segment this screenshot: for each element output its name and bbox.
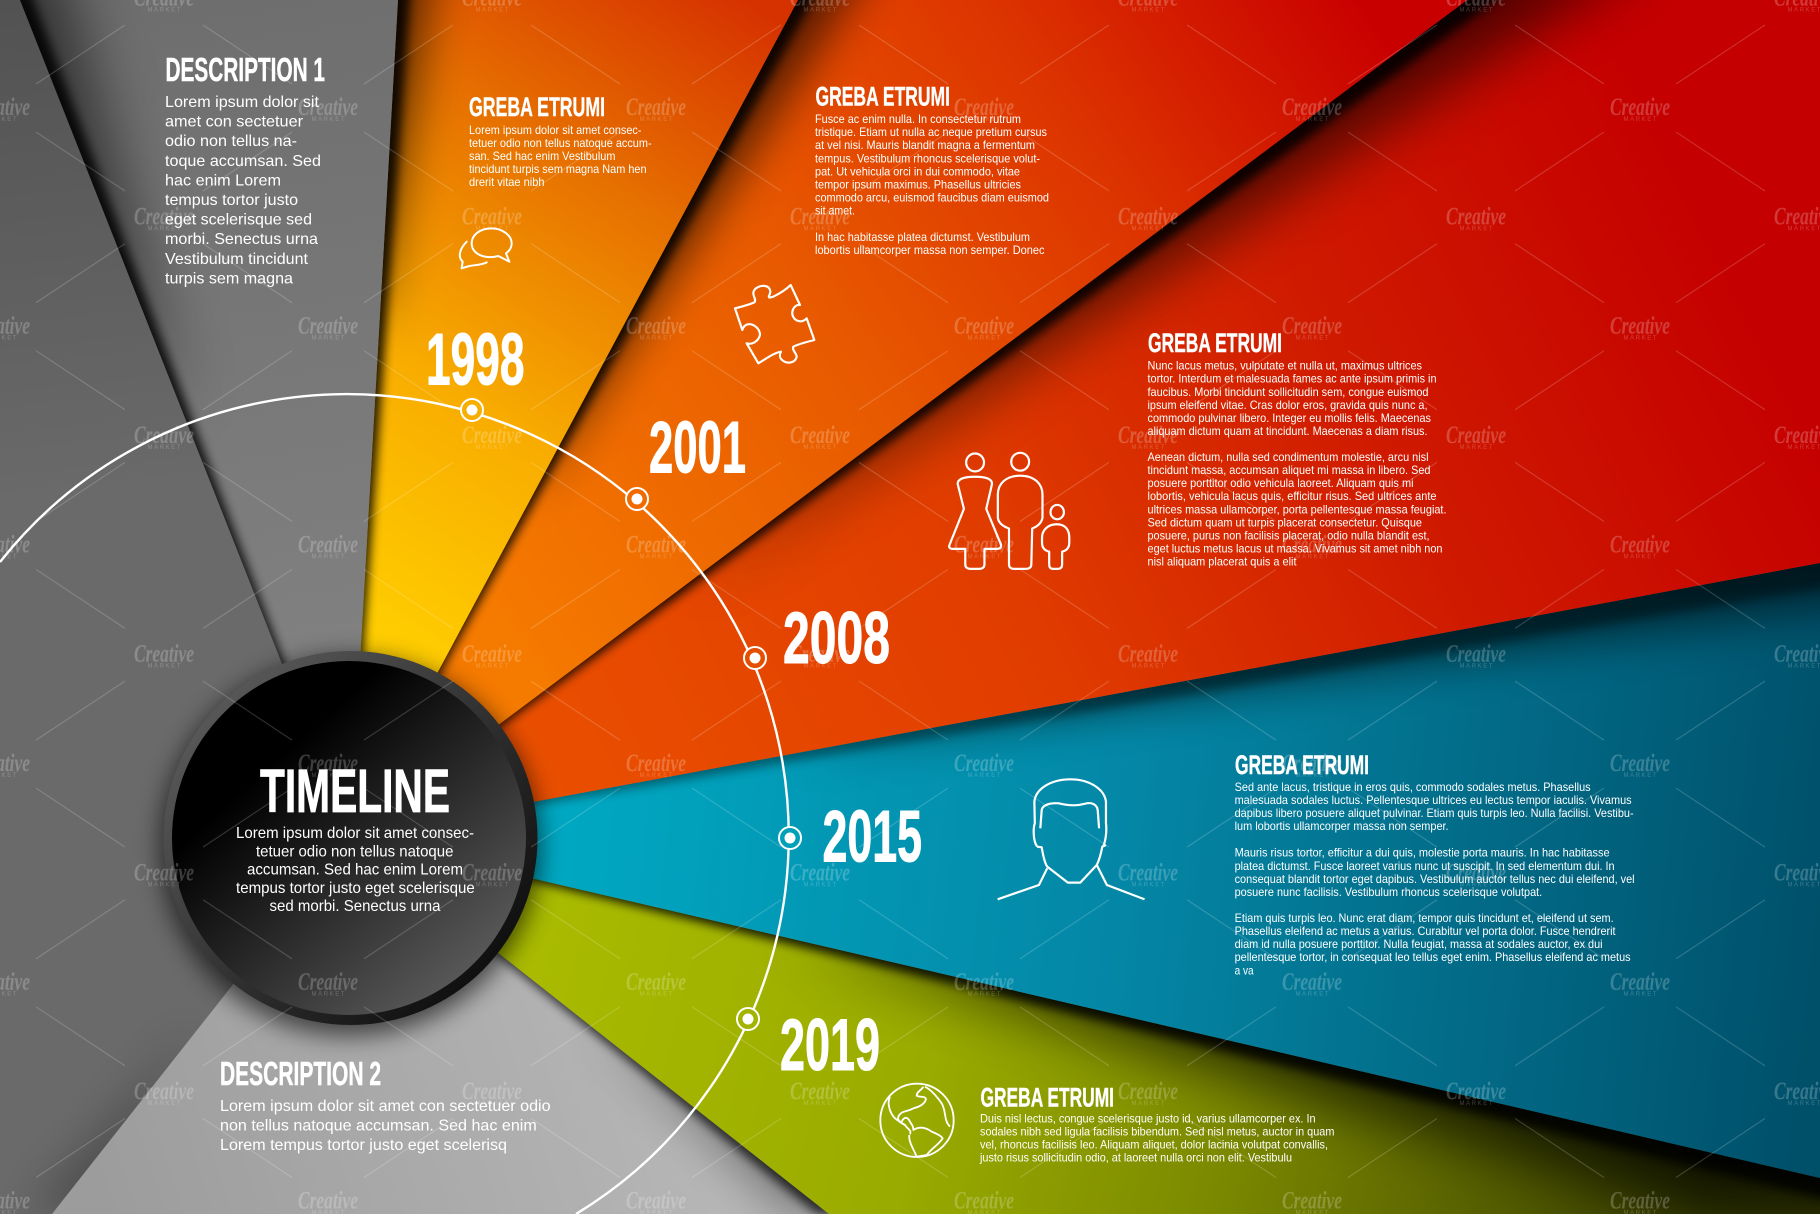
year 1998 with marker: 1998	[426, 320, 524, 401]
text block: greba etrumi blue: lum lobortis ullamcorper massa non semper.	[1235, 820, 1449, 833]
text block: greba etrumi yellow: Lorem ipsum dolor sit amet consec-	[469, 124, 642, 137]
text block: greba etrumi yellow: tetuer odio non tellus natoque accum-	[469, 137, 652, 150]
text block: greba etrumi red: ipsum eleifend vitae. Cras dolor eros, gravida quis nunc a,	[1148, 399, 1428, 412]
text block: greba etrumi red: GREBA ETRUMI	[1148, 328, 1282, 358]
text block: greba etrumi red: ultrices massa ullamcorper, porta pellentesque massa feugiat.	[1148, 503, 1446, 516]
text block: description 2: Lorem tempus tortor justo eget scelerisq	[220, 1137, 507, 1154]
year 2015 with marker	[779, 797, 922, 878]
text block: greba etrumi blue: a va	[1235, 964, 1254, 977]
text block: greba etrumi orange: tristique. Etiam ut nulla ac neque pretium cursus	[815, 126, 1047, 139]
text block: greba etrumi blue: Sed ante lacus, tristique in eros quis, commodo sodales metus. Phasellus	[1235, 781, 1591, 794]
icon: chat bubbles	[460, 228, 512, 268]
year 1998 with marker	[426, 320, 524, 421]
text block: greba etrumi red: Nunc lacus metus, vulputate et nulla ut, maximus ultrices	[1148, 360, 1422, 373]
text block: greba etrumi blue: Etiam quis turpis leo. Nunc erat diam, tempor quis tincidunt et, eleifend ut sem.	[1235, 912, 1614, 925]
text block: greba etrumi green: sodales nibh sed ligula facilisis bibendum. Sed nisl metus, auctor in quam	[980, 1126, 1334, 1139]
icon: globe	[880, 1084, 954, 1157]
text block: greba etrumi blue: consequat blandit tortor eget dapibus. Vestibulum auctor tellus nec dui eleifend, vel	[1235, 873, 1635, 886]
text block: greba etrumi green	[979, 1083, 1334, 1165]
year 2015 with marker: 2015	[822, 797, 922, 878]
timeline arc	[0, 394, 789, 1214]
year 2008 with marker	[744, 598, 890, 679]
panel: green	[498, 878, 1820, 1214]
text block: greba etrumi orange	[815, 82, 1049, 257]
text block: greba etrumi blue	[1235, 750, 1635, 977]
text block: greba etrumi blue: dapibus libero posuere aliquet pulvinar. Etiam quis turpis leo. Nulla facilisi. Vestibu-	[1235, 807, 1634, 820]
icon: head portrait	[998, 779, 1145, 899]
text block: greba etrumi red: aliquam dictum quam at tincidunt. Maecenas a diam risus.	[1148, 425, 1428, 438]
text block: description 1: amet con sectetuer	[165, 114, 304, 131]
panel: red	[499, 0, 1820, 802]
text block: description 2: Lorem ipsum dolor sit amet con sectetuer odio	[220, 1098, 551, 1115]
text block: description 1: turpis sem magna	[165, 270, 293, 287]
text block: greba etrumi red	[1148, 328, 1446, 569]
text block: greba etrumi blue: platea dictumst. Fusce laoreet varius nunc ut suscipit. In sed elementum dui. In	[1235, 860, 1615, 873]
text block: greba etrumi red: commodo pulvinar libero. Integer eu mollis felis. Maecenas	[1148, 412, 1431, 425]
year 2001 with marker: 2001	[649, 408, 746, 489]
text block: description 1: odio non tellus na-	[165, 133, 297, 150]
year 2008 with marker: 2008	[783, 598, 890, 679]
text block: greba etrumi orange: commodo arcu, euismod faucibus diam euismod	[815, 192, 1049, 205]
panel: mid grey	[20, 0, 398, 664]
title: timeline: TIMELINE	[260, 757, 450, 825]
text block: description 1: tempus tortor justo	[165, 192, 298, 209]
panel: blue	[533, 563, 1820, 1178]
text block: greba etrumi blue: Mauris risus tortor, efficitur a dui quis, molestie porta mauris. In hac habitasse	[1235, 847, 1610, 860]
text block: description 1: Lorem ipsum dolor sit	[165, 94, 320, 111]
text block: greba etrumi blue: posuere nunc facilisis. Vestibulum rhoncus scelerisque volutpat.	[1235, 886, 1542, 899]
text block: greba etrumi red: tortor. Interdum et malesuada fames ac ante ipsum primis in	[1148, 373, 1436, 386]
text block: greba etrumi yellow: GREBA ETRUMI	[469, 92, 605, 122]
text block: description 1: morbi. Senectus urna	[165, 231, 318, 248]
text block: greba etrumi orange: GREBA ETRUMI	[816, 82, 950, 112]
text block: greba etrumi red: posuere, purus non facilisis placerat, odio nulla blandit est,	[1148, 529, 1430, 542]
text block: description 2: DESCRIPTION 2	[220, 1055, 381, 1092]
text block: description 1: Vestibulum tincidunt	[165, 251, 309, 268]
text block: greba etrumi blue: GREBA ETRUMI	[1235, 750, 1369, 780]
text block: greba etrumi orange: pat. Ut vehicula orci in dui commodo, vitae	[815, 165, 1020, 178]
text block: greba etrumi blue: Phasellus eleifend ac metus a varius. Curabitur vel porta dolor. Fusce hendrerit	[1235, 925, 1616, 938]
panel: yellow	[360, 0, 798, 672]
text block: greba etrumi red: faucibus. Morbi tincidunt sollicitudin sem, congue euismod	[1148, 386, 1428, 399]
title: timeline	[236, 757, 475, 915]
text block: greba etrumi orange: Fusce ac enim nulla. In consectetur rutrum	[815, 113, 1021, 126]
text block: greba etrumi green: GREBA ETRUMI	[980, 1083, 1114, 1113]
title: timeline: Lorem ipsum dolor sit amet consec-	[236, 825, 474, 842]
text block: greba etrumi green: vel, rhoncus facilisis leo. Aliquam aliquet, dolor lacinia volutpat convallis,	[980, 1139, 1328, 1152]
text block: greba etrumi red: Aenean dictum, nulla sed condimentum molestie, arcu nisl	[1148, 451, 1428, 464]
text block: description 2	[220, 1055, 551, 1154]
text block: description 1: toque accumsan. Sed	[165, 153, 321, 170]
title: timeline: tempus tortor justo eget scelerisque	[236, 880, 475, 897]
center circle	[160, 651, 540, 1036]
icon: puzzle piece	[735, 285, 814, 363]
text block: description 1	[165, 51, 325, 287]
text block: greba etrumi green: Duis nisl lectus, congue scelerisque justo id, varius ullamcorper ex. In	[980, 1112, 1316, 1126]
text block: greba etrumi orange: tempus. Vestibulum rhoncus scelerisque volut-	[815, 152, 1040, 165]
title: timeline: tetuer odio non tellus natoque	[256, 843, 453, 860]
text block: greba etrumi orange: sit amet.	[815, 205, 855, 218]
text block: greba etrumi yellow: san. Sed hac enim Vestibulum	[469, 150, 615, 163]
text block: description 2: non tellus natoque accumsan. Sed hac enim	[220, 1118, 537, 1135]
text block: greba etrumi blue: pellentesque tortor, in consequat leo tellus eget enim. Phasellus eleifend ac metus	[1235, 951, 1631, 964]
panel: orange	[438, 0, 1467, 724]
text block: greba etrumi yellow: drerit vitae nibh	[469, 176, 544, 189]
text block: greba etrumi red: eget luctus metus lacus ut massa. Vivamus sit amet nibh non	[1148, 542, 1442, 556]
text block: greba etrumi blue: malesuada sodales luctus. Pellentesque ultrices eu lectus tempor iaculis. Vivamus	[1235, 794, 1632, 807]
text block: greba etrumi yellow	[469, 92, 652, 189]
text block: greba etrumi red: posuere porttitor odio vehicula laoreet. Aliquam quis mi	[1148, 477, 1414, 490]
text block: greba etrumi red: Sed dictum quam ut turpis placerat consectetur. Quisque	[1148, 516, 1422, 529]
text block: greba etrumi red: lobortis, vehicula lacus quis, efficitur risus. Sed ultrices ante	[1148, 490, 1436, 503]
title: timeline: accumsan. Sed hac enim Lorem	[247, 862, 463, 879]
panel: light grey bottom	[52, 955, 828, 1214]
text block: greba etrumi orange: at vel nisi. Mauris blandit magna a fermentum	[815, 139, 1035, 152]
text block: greba etrumi orange: tempor ipsum maximus. Phasellus ultricies	[815, 178, 1021, 192]
title: timeline: sed morbi. Senectus urna	[270, 898, 441, 915]
text block: greba etrumi green: justo risus sollicitudin odio, at laoreet nulla orci non elit. Vestibulu	[979, 1152, 1292, 1165]
text block: greba etrumi orange: lobortis ullamcorper massa non semper. Donec	[815, 244, 1045, 257]
text block: greba etrumi red: nisl aliquam placerat quis a elit	[1148, 556, 1297, 569]
text block: greba etrumi yellow: tincidunt turpis sem magna Nam hen	[469, 163, 646, 176]
text block: greba etrumi orange: In hac habitasse platea dictumst. Vestibulum	[815, 231, 1030, 244]
text block: description 1: hac enim Lorem	[165, 172, 281, 189]
text block: description 1: eget scelerisque sed	[165, 212, 312, 229]
year 2019 with marker	[737, 1005, 880, 1086]
text block: greba etrumi red: tincidunt massa, accumsan aliquet mi massa in libero. Sed	[1148, 464, 1430, 477]
year 2019 with marker: 2019	[780, 1005, 880, 1086]
year 2001 with marker	[626, 408, 746, 510]
icon: family	[949, 453, 1069, 569]
panel: dark grey left	[0, 0, 146, 1209]
text block: greba etrumi blue: diam id nulla posuere porttitor. Nulla feugiat, massa at sodales auctor, ex dui	[1235, 938, 1603, 951]
text block: description 1: DESCRIPTION 1	[166, 51, 325, 88]
